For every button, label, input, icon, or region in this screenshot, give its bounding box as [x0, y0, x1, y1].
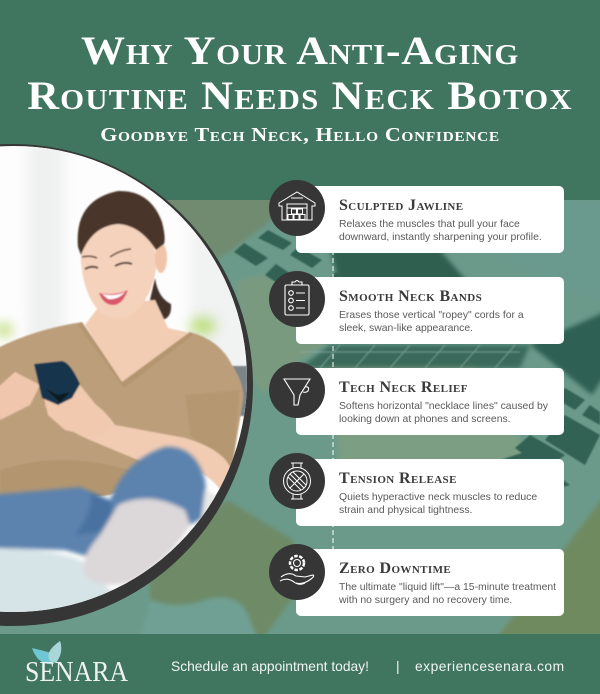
- text: tension release: strain and physical tightness.: [339, 505, 472, 516]
- text: smooth neck bands: Erases those vertical "ropey" cords for a: [339, 310, 524, 320]
- text: smooth neck bands: sleek, swan-like appearance.: [339, 323, 473, 334]
- left hand: [0, 372, 40, 420]
- heading: sculpted jawline: Sculpted Jawline: [339, 197, 463, 214]
- text: tech neck relief: Softens horizontal "necklace lines" caused by: [339, 400, 548, 412]
- panel: tension release: [296, 459, 564, 526]
- icon: warehouse: [269, 180, 325, 236]
- ponytail: [150, 278, 171, 320]
- hair: [78, 191, 165, 255]
- heading: tech neck relief: Tech Neck Relief: [339, 379, 468, 396]
- frame: dark circle border: [0, 144, 253, 626]
- keyboard dark band right: [530, 312, 600, 395]
- heading: tension release: Tension Release: [339, 470, 457, 487]
- forearm: [45, 405, 230, 490]
- panel: zero downtime: [296, 549, 564, 616]
- pillow: [0, 548, 112, 612]
- face: [80, 223, 157, 309]
- subtitle: Goodbye Tech Neck, Hello Confidence: [100, 124, 500, 146]
- logo: Senara: [25, 641, 128, 688]
- separator: |: [396, 659, 400, 674]
- sock: [83, 499, 190, 585]
- heading: zero downtime: Zero Downtime: [339, 560, 451, 577]
- icon: checklist clipboard: [269, 271, 325, 327]
- phone: [34, 361, 80, 405]
- dashed connector: [332, 253, 334, 549]
- neck: [85, 300, 190, 384]
- heading: smooth neck bands: Smooth Neck Bands: [339, 288, 482, 305]
- hand and wrist: [236, 276, 345, 395]
- fingers: [330, 350, 530, 475]
- dark wedge under lid: [330, 250, 470, 285]
- eyes and brows: [82, 249, 131, 258]
- background photo: laptop keyboard with green overlay: [0, 200, 600, 634]
- sofa: [232, 365, 247, 417]
- blurred teal blob: [140, 598, 258, 640]
- text: smooth neck bands: [339, 310, 524, 334]
- text: sculpted jawline: downward, instantly sharpening your profile.: [339, 232, 542, 243]
- title line 2: Routine Needs Neck Botox: [27, 73, 573, 118]
- text: tech neck relief: [339, 400, 548, 425]
- footer band: [0, 634, 600, 694]
- icon: funnel: [269, 362, 325, 418]
- panel: smooth neck bands: [296, 277, 564, 344]
- icon: hand holding gear: [269, 544, 325, 600]
- call to action: Schedule an appointment today!: [171, 659, 369, 674]
- top right lighter lid: [450, 200, 600, 300]
- wood lower wedge: [150, 500, 298, 640]
- jeans: [0, 447, 208, 560]
- website: experiencesenara.com: [415, 659, 565, 674]
- text: zero downtime: with no surgery and no recovery time.: [339, 595, 512, 606]
- text: sculpted jawline: Relaxes the muscles that pull your face: [339, 218, 520, 230]
- smile: [99, 290, 128, 305]
- text: zero downtime: The ultimate "liquid lift"—a 15-minute treatment: [339, 582, 556, 592]
- panel: sculpted jawline: [296, 186, 564, 253]
- text: tech neck relief: looking down at phones and screens.: [339, 414, 511, 425]
- sweater: [0, 322, 243, 500]
- key gaps: [300, 345, 520, 368]
- panel: tech neck relief: [296, 368, 564, 435]
- text: tension release: Quiets hyperactive neck muscles to reduce: [339, 492, 537, 502]
- right hand: [44, 384, 95, 432]
- text: tension release: [339, 492, 537, 516]
- photo: smiling woman on sofa using a phone, in a circular frame: [0, 144, 253, 626]
- text: sculpted jawline: [339, 218, 542, 243]
- icon: valve: [269, 453, 325, 509]
- upper keys: [258, 230, 292, 250]
- logo mark: leaf: [32, 641, 62, 664]
- wood lower right: [495, 495, 600, 640]
- wood top left: [150, 195, 305, 300]
- right keys: [545, 415, 600, 465]
- text: zero downtime: [339, 582, 556, 606]
- title line 1: Why Your Anti-Aging: [81, 28, 519, 73]
- logo wordmark: SENARA: [25, 657, 128, 688]
